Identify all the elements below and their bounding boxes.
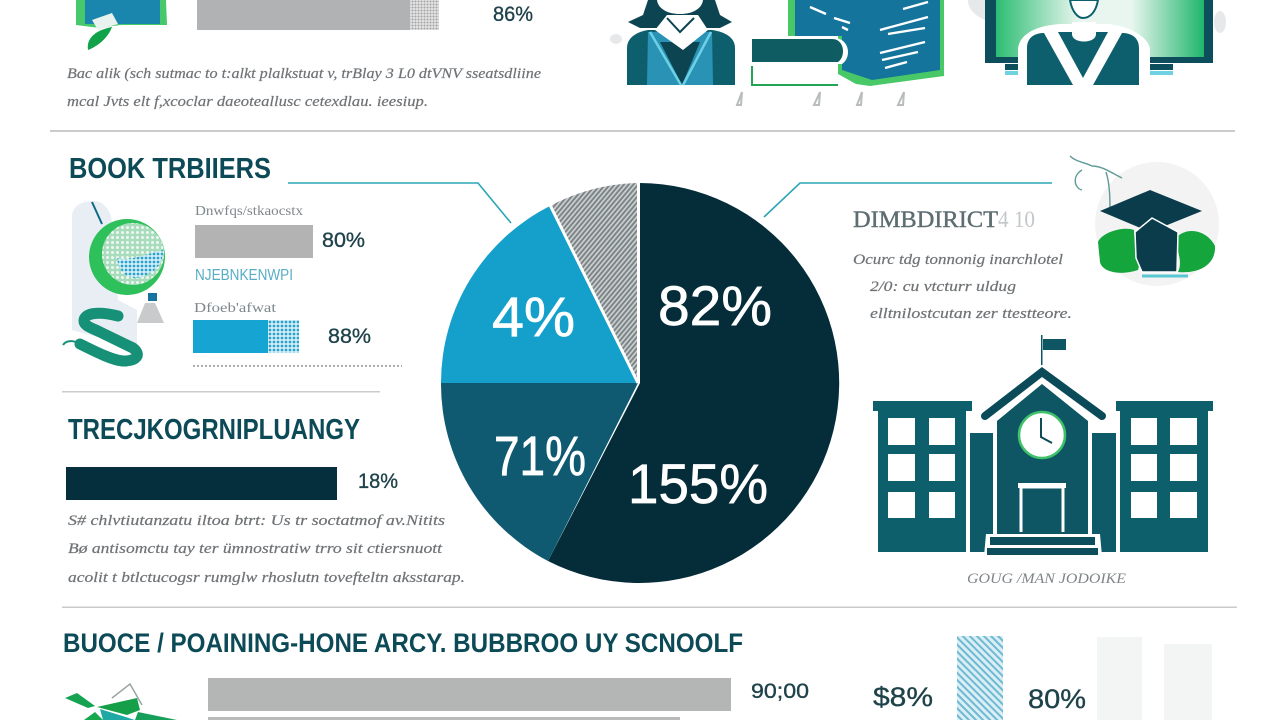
right heading: DIMBDIRICT bbox=[853, 207, 998, 232]
bar label: Dfoeb'afwat bbox=[194, 301, 276, 316]
steps bbox=[984, 534, 1102, 556]
blue bar value: 88% bbox=[328, 325, 371, 348]
slice separators bbox=[550, 183, 638, 383]
divider bbox=[50, 130, 1235, 132]
slice: hatched bbox=[550, 183, 638, 382]
gray bar value: 80% bbox=[322, 229, 365, 252]
blue bar bbox=[193, 320, 299, 353]
right wing bbox=[1116, 401, 1213, 552]
top text block: Bac alik (sch sutmac to t:alkt plalkstuat v, trBlay 3 L0 dtVNV sseatsdliine bbox=[67, 66, 542, 82]
heading: book trainers: BOOK TRBIIERS bbox=[69, 153, 271, 185]
central block bbox=[997, 384, 1088, 540]
clock bbox=[1019, 412, 1065, 458]
bottom bar value: 90;00 bbox=[751, 680, 809, 703]
column value: 80% bbox=[1028, 684, 1086, 714]
text block: acolit t btlctucogsr rumglw rhoslutn tovefteltn aksstarap. bbox=[68, 570, 465, 586]
bottom bars bbox=[208, 678, 731, 720]
text block: S# chlvtiutanzatu iltoa btrt: Us tr soctatmof av.Nitits bbox=[68, 513, 445, 529]
column value: $8% bbox=[873, 682, 933, 712]
hatched column bbox=[957, 636, 1003, 720]
flag bbox=[1041, 335, 1066, 365]
label 155%: 155% bbox=[628, 452, 768, 515]
leader line left bbox=[288, 183, 511, 223]
left wing bbox=[873, 401, 972, 552]
roof bbox=[985, 372, 1102, 416]
dotted line bbox=[193, 365, 402, 367]
heading: technology: TRECJKOGRNIPLUANGY bbox=[68, 414, 360, 446]
heading: bottom: BUOCE / POAINING-HONE ARCY. BUBBROO UY SCNOOLF bbox=[63, 628, 743, 658]
top progress bar bbox=[197, 0, 439, 30]
bar label: Dnwfqs/stkaocstx bbox=[195, 204, 303, 219]
dark bar value: 18% bbox=[358, 470, 398, 493]
icon: globe and clip bbox=[63, 201, 165, 361]
top bar value: 86% bbox=[493, 3, 533, 26]
right text block: 2/0: cu vtcturr uldug bbox=[870, 279, 1016, 295]
top text block: mcal Jvts elt f,xcoclar daeoteallusc cetexdlau. ieesiup. bbox=[67, 94, 428, 110]
right text block: Ocurc tdg tonnonig inarchlotel bbox=[853, 252, 1063, 268]
slice: teal 71% bbox=[441, 383, 638, 561]
divider bbox=[62, 606, 1237, 608]
text block: Bø antisomctu tay ter ümnostratiw trro sit ctiersnuott bbox=[68, 541, 443, 557]
icon: graduation cap bbox=[1070, 156, 1219, 286]
slice: blue 4% bbox=[441, 206, 638, 383]
icon: open book and stack bbox=[750, 0, 944, 86]
top text block bbox=[67, 66, 542, 110]
pale columns bbox=[1097, 637, 1212, 720]
door bbox=[1021, 487, 1063, 532]
school caption: GOUG /MAN JODOIKE bbox=[967, 571, 1126, 587]
divider bbox=[62, 391, 380, 392]
icon: green origami bbox=[65, 684, 177, 720]
icon: school building bbox=[873, 335, 1213, 556]
slice: dark 82% bbox=[548, 183, 839, 583]
small pencil marks bbox=[737, 92, 904, 105]
right text block: elltnilostcutan zer ttestteore. bbox=[870, 306, 1072, 322]
connectors bbox=[970, 433, 993, 552]
pie chart bbox=[441, 183, 839, 583]
right text block bbox=[853, 252, 1072, 322]
leader line right bbox=[764, 183, 1052, 217]
icon: monitor with graduate bbox=[968, 0, 1226, 85]
right heading: 4 10 bbox=[998, 207, 1035, 232]
label 4%: 4% bbox=[492, 285, 575, 348]
cyan label: NJEBNKENWPI bbox=[195, 267, 293, 284]
text block bbox=[68, 513, 465, 586]
label 71%: 71% bbox=[494, 424, 586, 487]
dark bar bbox=[66, 467, 337, 500]
gray bar bbox=[195, 225, 313, 258]
icon: woman teacher bbox=[610, 0, 735, 85]
chart: left bars bbox=[193, 204, 402, 366]
top-left icon: book leaf bbox=[76, 0, 167, 50]
label 82%: 82% bbox=[658, 274, 772, 337]
